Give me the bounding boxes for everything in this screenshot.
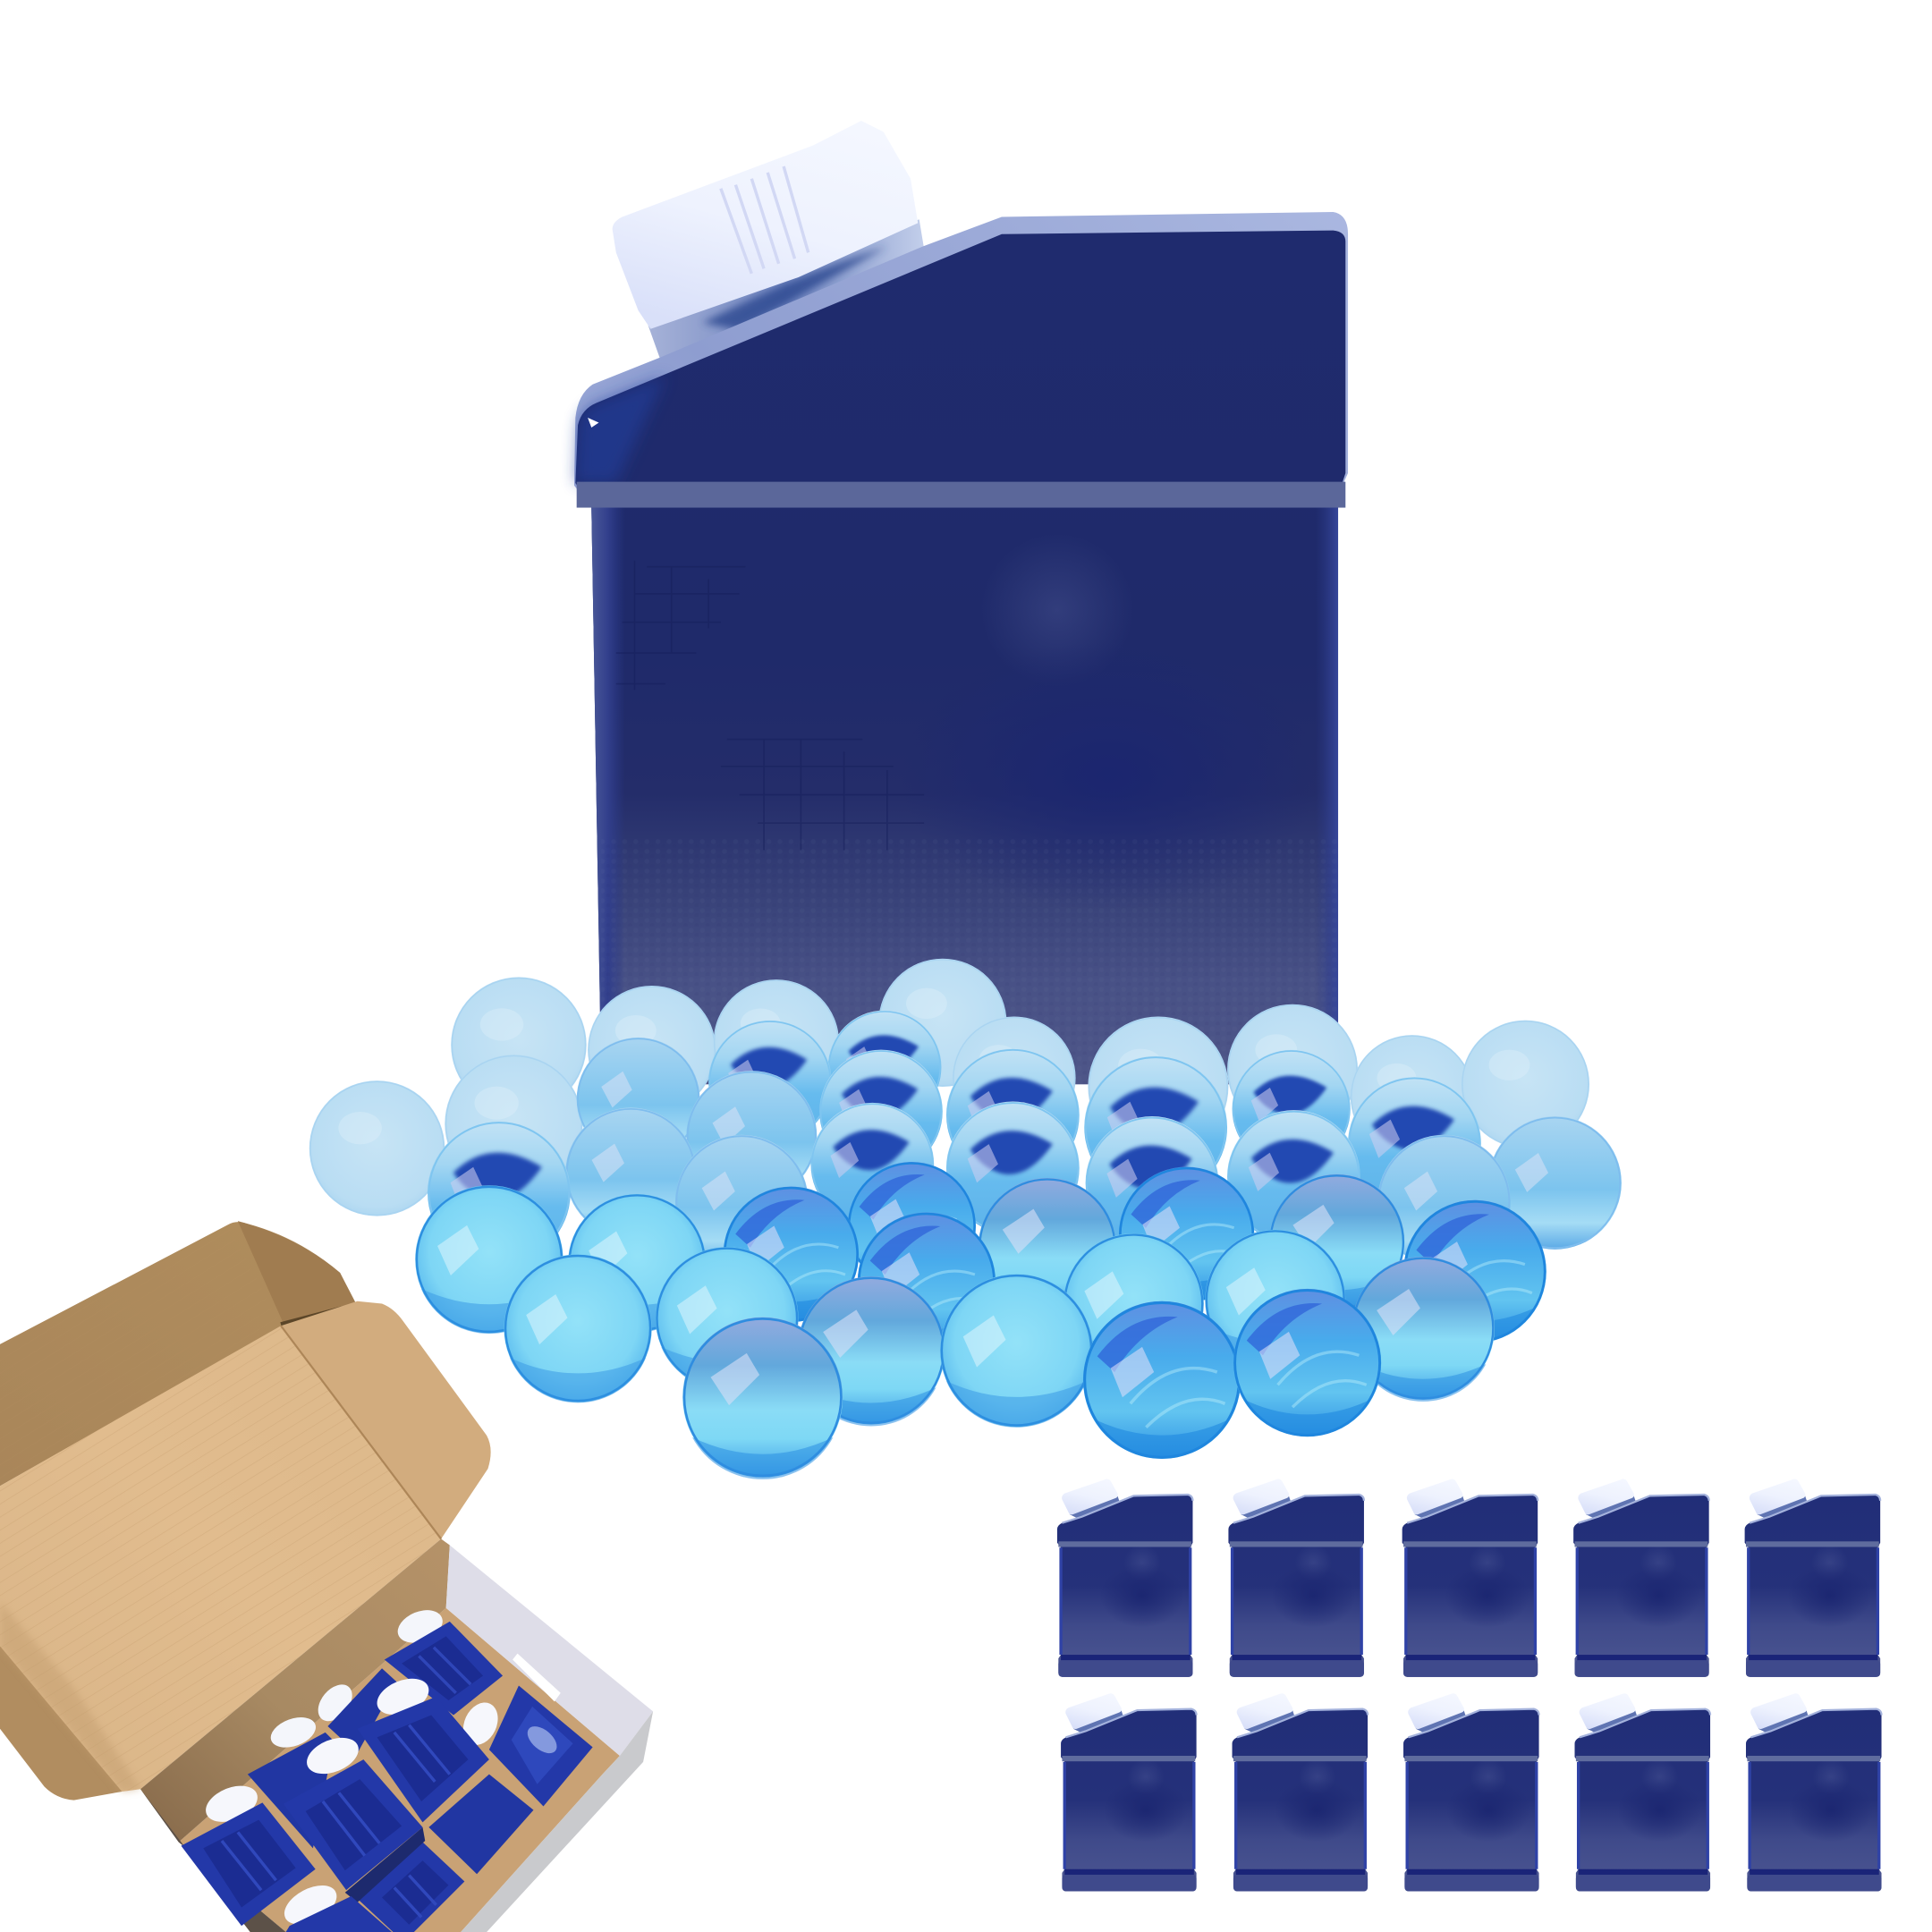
bottle bead texture (601, 838, 1338, 1084)
packed bottle (284, 1759, 422, 1890)
packed bottle (357, 1842, 464, 1932)
bottle highlight corner (575, 376, 665, 483)
box white side wall (446, 1545, 653, 1756)
bottle crack texture (616, 561, 924, 851)
packed bottle (428, 1775, 533, 1874)
packed bottle cap (311, 1678, 359, 1727)
bottle body (575, 231, 1345, 1084)
box white notch (513, 1654, 561, 1701)
packed bottle (181, 1802, 316, 1926)
packed bottle cap (267, 1712, 320, 1753)
packed bottle (327, 1668, 397, 1753)
packed bottle cap (372, 1672, 434, 1722)
white bottle cap (613, 121, 918, 329)
box inner wall (140, 1539, 450, 1842)
small bottle row 2 (1061, 1693, 1882, 1892)
packed bottle cap (393, 1604, 447, 1648)
box outer corrugated edge (461, 1711, 653, 1932)
bottle band (577, 482, 1345, 508)
packed bottle (489, 1685, 593, 1806)
packed bottle (286, 1896, 392, 1932)
box right tab (281, 1301, 491, 1539)
main bottle (574, 121, 1348, 1084)
packed bottle cap (278, 1877, 343, 1932)
packed bottle (357, 1697, 489, 1822)
bead pile (309, 959, 1622, 1479)
box side flap (0, 1646, 122, 1801)
small bottle row 1 (1057, 1479, 1880, 1677)
box near wall edge (140, 1789, 286, 1932)
small bottles grid (1057, 1479, 1882, 1892)
bottle neck (648, 219, 924, 360)
packed bottle (385, 1622, 503, 1716)
packed bottle cap (457, 1697, 504, 1750)
cardboard box (0, 1221, 653, 1932)
packed bottles (181, 1604, 593, 1932)
box back flap (0, 1221, 356, 1486)
packed bottle cap (301, 1731, 364, 1781)
packed bottle (248, 1733, 334, 1848)
packed bottle cap (200, 1779, 263, 1829)
bottle shell edge (574, 212, 1348, 1084)
packed bottle shadow (345, 1827, 425, 1902)
box lid (0, 1326, 441, 1792)
box floor (179, 1608, 620, 1932)
